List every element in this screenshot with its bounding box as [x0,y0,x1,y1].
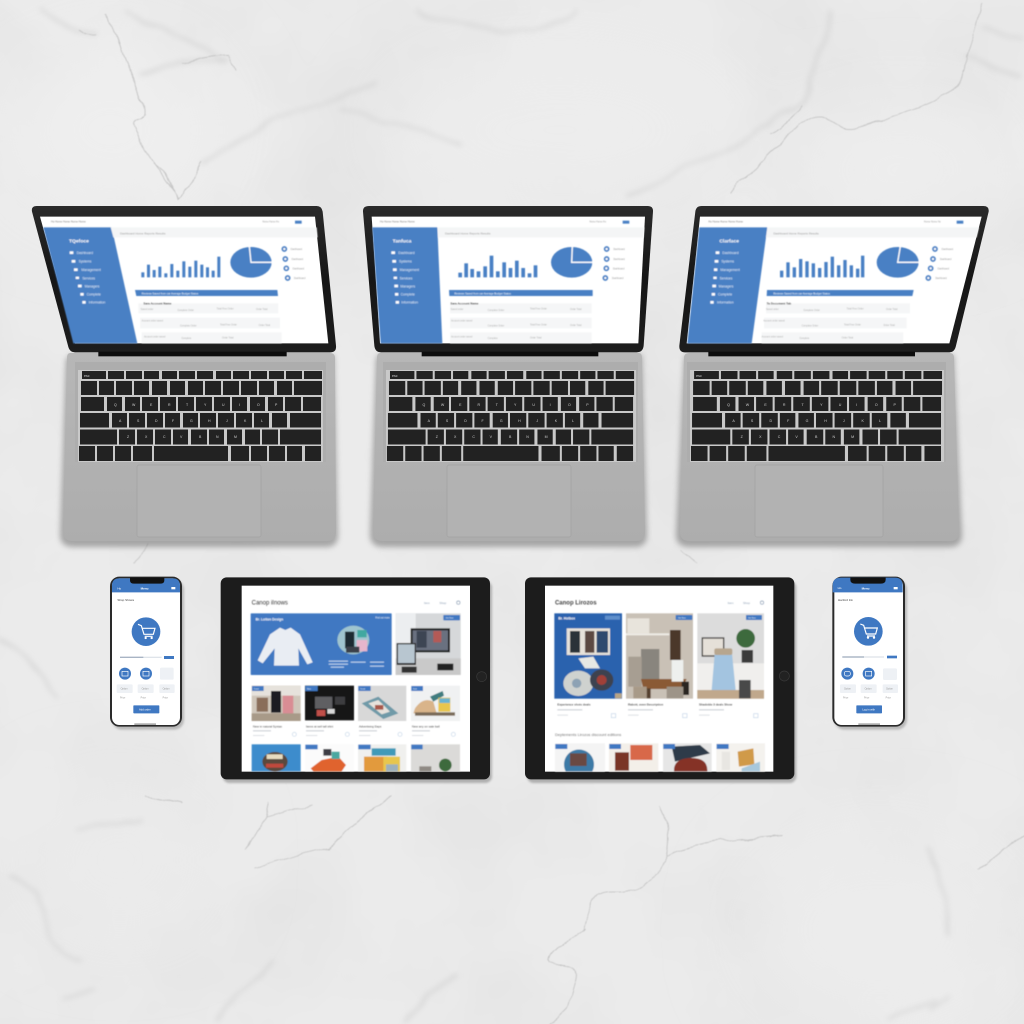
data table: Account order saved [451,320,473,323]
sidebar: Systems [721,260,734,264]
bar chart [780,256,864,277]
table band [767,290,914,296]
sidebar: Management [400,268,419,272]
laptop 3 base and keyboard: esc [696,374,702,378]
sidebar: Services [400,276,413,280]
product card 4: Sale [413,688,418,690]
hero banner: Br. Lotion Design [256,617,283,621]
chart legend: Dashboard [291,248,303,251]
tablet 2 title: Canop Lirozos [555,601,597,607]
table band: Reviews Saved from car Average Budget Status [454,291,512,295]
top navigation [380,220,644,237]
data table: Account order saved [144,336,166,339]
sidebar: Dashboard [77,251,93,255]
phone 2 [832,577,907,730]
sidebar: Managers [85,284,100,288]
phone 2 option icons: Option [886,688,894,691]
data table: Complete [181,337,192,340]
tablet 1 [221,577,492,783]
product card 3: Advertising Days [359,724,382,728]
phone 2 option icons: Price [864,696,870,699]
feature card 1: Experience shots deals [557,703,591,707]
sidebar: Management [720,268,740,272]
table band: Reviews Saved from car Average Budget Status [773,291,831,295]
sidebar: TQefoce [69,239,89,245]
tablet 2 [525,577,796,783]
phone 1 option icons: Price [163,696,169,699]
laptop 2 base and keyboard: ZXCVBNM [436,435,548,439]
feature card 2 [626,613,693,718]
laptop 3 base and keyboard: ZXCVBNM [741,435,854,439]
top navigation: Dashboard Home Reports Results [773,231,819,235]
section heading: Deptements Lirozos discount editions [555,732,621,737]
top navigation: Ho Home Home Home Home [51,220,86,224]
product card 2 [305,686,354,736]
product card 1 [252,686,301,736]
data table: Ta Document Tab [767,302,791,306]
chart legend: Dashboard [940,258,952,261]
data table: Order Total [570,308,582,311]
hero collage [337,626,369,654]
chart legend: Dashboard [613,258,625,261]
laptop 1 [32,206,338,547]
data table: Total Free Order [847,307,864,310]
data table: Order Total [530,336,542,339]
product card 3 [358,686,406,736]
data table: Complete Order [803,309,820,312]
bottom product row [555,743,765,772]
data table: Total Free Order [530,324,547,327]
data table: Order Total [256,308,268,311]
data table: Total Free Order [844,324,861,327]
laptop 1 base and keyboard: ASDFGHJKL [119,419,263,423]
sidebar: Dashboard [398,251,415,255]
chart legend: Dashboard [938,267,950,270]
laptop 2 base and keyboard: esc [392,374,398,378]
sidebar: Complete [718,292,732,296]
phone 2 header [833,578,903,592]
data table: Account order saved [762,336,784,339]
phone 2 option icons: Price [886,696,892,699]
hero banner: Find out more [375,617,390,620]
feature card 3: Shadoble 3 deals Show [699,703,733,707]
sidebar: Dashboard [722,251,739,255]
sidebar [43,227,137,343]
top navigation [51,220,318,237]
data table: Account order saved [763,320,785,323]
icon: white shirt [258,628,313,666]
laptop 1 lid and screen [32,206,336,356]
phone 1 header: Menu [141,587,149,591]
chart legend: Dashboard [935,277,947,280]
progress bar [842,656,897,658]
table band: Reviews Saved from car Average Budget Status [142,291,199,295]
product card 2: New [307,688,312,690]
sidebar: Information [401,301,418,305]
phone 2 option icons [840,668,898,699]
product card 2: Items at sell tall shirt [306,724,333,728]
chart legend [603,247,625,280]
chart legend: Dashboard [292,258,304,261]
data table: Order Total [259,324,271,327]
sidebar: Clarface [719,239,739,245]
sidebar: Managers [400,284,415,288]
feature card 1: Br. Hotbox [558,616,575,620]
tablet 2 header links: Item [728,601,734,605]
phone 2 header: Menu [862,586,870,590]
sidebar: Systems [79,260,92,264]
laptop 2 base and keyboard: QWERTYUIOP [423,403,589,407]
pie chart [877,246,919,278]
laptop 3 [676,206,989,547]
chart legend: Dashboard [613,267,625,270]
phone 1 option icons: Price [141,696,147,699]
tablet 1 title: Canop iInows [252,601,288,607]
phone 2 button [856,705,882,713]
product card 3: Trend [360,687,365,690]
data table: Order Total [222,336,234,339]
tablet 2 header links: Shop [743,601,750,605]
phone 2 header: Ho [838,586,842,590]
laptop 3 base and keyboard: ASDFGHJKL [732,419,881,423]
data table: Complete Order [488,309,504,312]
top navigation [708,220,979,237]
phone 2 button: Log in with [862,707,876,711]
laptop 1 base and keyboard: QWERTYUIOP [114,403,278,407]
sidebar: Complete [401,292,415,296]
laptop 3 base and keyboard [676,353,962,547]
feature card 1 [554,613,622,718]
pie chart [551,246,593,278]
phone 1 option icons [117,668,175,699]
chart legend: Dashboard [613,248,625,251]
chart legend [926,247,954,280]
laptop 1 base and keyboard: ZXCVBNM [127,435,237,439]
phone 1 option icons: Option [163,688,170,691]
sidebar: Complete [87,292,101,296]
tablet 1 header links [424,601,460,605]
laptop 2 lid and screen [363,206,653,356]
data table [762,302,910,343]
table band [449,290,593,296]
icon: shopping cart [854,617,883,646]
product card 4 [411,686,460,736]
laptop 2 base and keyboard [370,353,647,547]
sidebar: Management [81,268,101,272]
sidebar: Managers [719,284,734,288]
top navigation: Home Home Ho [924,222,941,224]
laptop 1 base and keyboard: esc [84,374,90,378]
product card 4: New any on sale ball [412,724,440,728]
data table: Complete Order [180,325,197,328]
tablet 1 header links: Item [424,601,430,605]
data table: Sara Account Name [450,302,479,306]
data table: Order Total [883,324,895,327]
chart legend: Dashboard [294,277,306,280]
data table: Saved order [141,308,154,311]
top navigation: Dashboard Home Reports Results [120,231,166,235]
phone 1 option icons: Option [142,688,149,691]
data table: Complete Order [177,309,194,312]
data table: Complete [799,337,810,340]
top navigation: Ho Home Home Home Home [708,220,744,224]
chart legend: Dashboard [293,267,305,270]
sidebar: Information [89,301,105,305]
phone 1 option icons: Price [120,696,126,699]
laptop 1 base and keyboard [60,353,338,547]
sidebar [687,227,767,343]
data table [450,302,592,343]
top navigation: Home Home Ho [262,222,280,224]
phone 2 option icons: Option [865,688,872,691]
tablet 1 header links: Shop [439,601,447,605]
sidebar [372,227,442,343]
top navigation: Dashboard Home Reports Results [445,231,491,235]
data table: Account order saved [451,336,473,339]
top navigation: Home Home Ho [589,222,607,224]
icon: shopping cart [132,617,160,646]
bar chart [458,256,537,277]
data table: Complete Order [488,325,504,328]
bar chart [141,257,220,277]
phone 1 button: Add order [139,707,151,711]
sidebar: Services [82,276,95,280]
feature card 2: Get Now [678,616,686,619]
hero banner [251,613,392,675]
phone 1 header: Ho [117,586,121,590]
photo: desk with monitors [396,613,461,675]
phone 2 option icons: Option [844,688,852,691]
sidebar: Tanfuca [393,239,412,245]
data table: Total Free Order [530,307,547,310]
top navigation: Ho Home Home Home Home [380,220,415,224]
feature card 3 [697,613,764,718]
tablet 2 header links [728,601,764,605]
product card 1: Trend [254,687,259,690]
phone 2 option icons: Price [843,696,849,699]
data table: Account order saved [142,320,164,323]
photo: desk with monitors: Get Now [446,617,454,620]
data table: Complete [488,337,498,340]
data table: Saved order [451,308,464,311]
table band [135,290,278,296]
chart legend: Dashboard [612,277,624,280]
data table: Sara Account Name [143,302,172,306]
data table: Total Free Order [217,307,234,310]
laptop 2 [363,206,653,547]
pie chart [230,246,272,278]
sidebar: Information [717,301,734,305]
feature card 3: Get Now [748,616,756,619]
phone 2 title: Harford Ink [838,598,853,602]
data table: Total Free Order [220,324,237,327]
phone 1 title: Shop Shows [117,598,135,602]
data table: Saved order [766,308,779,311]
chart legend [282,247,306,280]
laptop 3 base and keyboard: QWERTYUIOP [727,403,897,407]
data table: Order Total [842,336,854,339]
phone 1 button [133,705,159,713]
phone 1 [110,577,184,730]
product card 1: New in natural Syntax [253,724,283,728]
data table: Order Total [886,308,898,311]
data table: Order Total [570,324,582,327]
data table [138,302,282,343]
chart legend: Dashboard [942,248,954,251]
feature card 2: Rabott, even Description [628,703,663,707]
sidebar: Systems [399,260,412,264]
laptop 3 lid and screen [679,206,989,356]
phone 1 header [112,578,180,592]
sidebar: Services [720,276,733,280]
progress bar [120,656,174,659]
laptop 2 base and keyboard: ASDFGHJKL [428,419,574,423]
data table: Complete Order [802,325,818,328]
phone 1 option icons: Option [121,688,128,691]
bottom product row [252,744,460,771]
